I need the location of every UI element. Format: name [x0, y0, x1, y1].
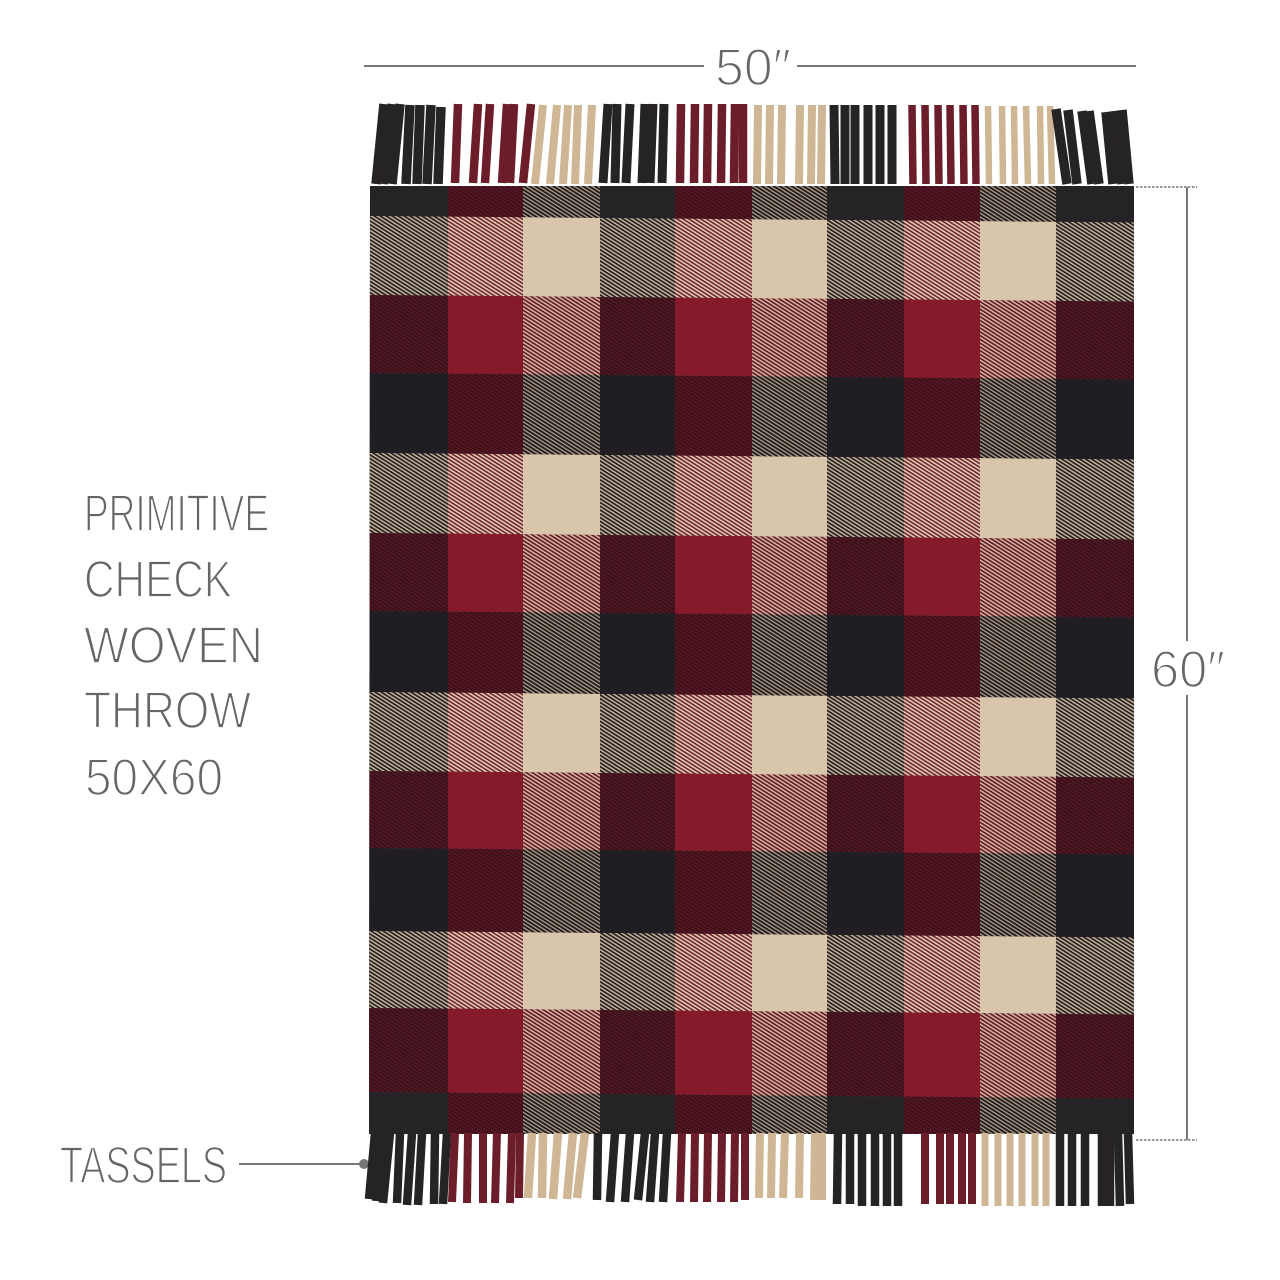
bottom fringe black 4 — [1060, 1133, 1130, 1206]
black warp columns — [369, 186, 1134, 1134]
top fringe tan 2 — [757, 105, 822, 184]
bottom fringe tan 3 — [985, 1133, 1046, 1206]
top fringe red 3 — [912, 105, 976, 184]
bottom fringe tan 1 — [528, 1133, 585, 1199]
bottom fringe black 3 — [837, 1133, 898, 1206]
panel: throw blanket — [340, 104, 1170, 1207]
top fringe black 3 — [834, 105, 892, 184]
bottom fringe black 1 — [369, 1133, 447, 1205]
bottom fringe red 2 — [680, 1133, 745, 1202]
plaid woven body — [369, 186, 1134, 1134]
leader line — [239, 1163, 363, 1165]
title line: PRIMITIVE: PRIMITIVE — [84, 485, 269, 543]
title line: THROW: THROW — [84, 682, 251, 740]
dimension line right — [797, 65, 1136, 67]
title line: 50X60: 50X60 — [85, 749, 223, 807]
tan warp columns — [523, 186, 1056, 1134]
tassels label: TASSELS — [60, 1137, 227, 1195]
red warp columns — [448, 186, 980, 1134]
height label: 60″ — [1151, 641, 1225, 699]
width label: 50″ — [715, 39, 791, 97]
top fringe — [376, 104, 1129, 184]
top fringe tan 3 — [988, 106, 1052, 184]
top fringe black 1 — [376, 104, 441, 184]
bottom fringe red 1 — [452, 1133, 520, 1203]
bottom fringe tan 2 — [759, 1133, 822, 1200]
title line: WOVEN: WOVEN — [84, 617, 263, 675]
top fringe red 2 — [680, 104, 743, 183]
dotted guide top — [1136, 186, 1197, 188]
top fringe black 2 — [603, 104, 664, 183]
bottom fringe black 2 — [597, 1133, 667, 1202]
top fringe black 4 — [1056, 109, 1129, 184]
dotted guide bottom — [1136, 1139, 1197, 1141]
panel: product title — [84, 485, 269, 807]
bottom fringe — [369, 1133, 1130, 1206]
dimension line left — [364, 65, 704, 67]
dimension line upper — [1186, 187, 1188, 641]
title line: CHECK: CHECK — [84, 551, 232, 609]
dimension line lower — [1186, 695, 1188, 1140]
top fringe tan 1 — [535, 105, 592, 184]
bottom fringe red 3 — [925, 1133, 972, 1204]
leader dot — [359, 1159, 369, 1169]
callout: tassels — [60, 1137, 369, 1195]
top fringe red 1 — [455, 104, 531, 183]
